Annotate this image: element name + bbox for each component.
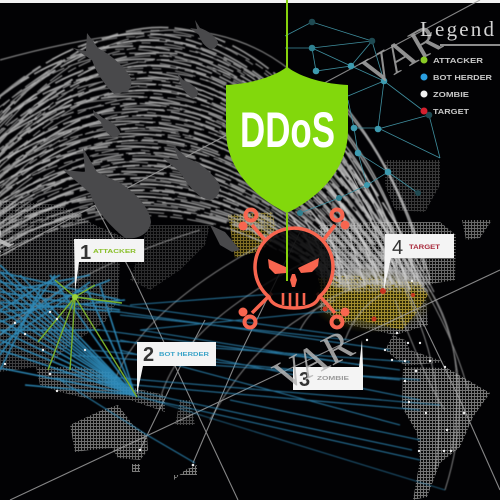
vertical green line <box>286 0 288 70</box>
bomb 1 <box>73 33 131 94</box>
top white strip <box>0 0 500 3</box>
watermark VAR top: VAR <box>354 15 449 97</box>
callout 4 target <box>384 234 454 290</box>
shield with DDoS: DDoS <box>240 102 335 158</box>
callout 2 bot herder: BOT HERDER <box>159 352 210 358</box>
bomb 7 <box>210 225 240 252</box>
legend item attacker: ATTACKER <box>433 58 483 65</box>
callout 4 target: 4 <box>392 237 403 259</box>
callout 4 target: TARGET <box>409 245 440 251</box>
legend item zombie: ZOMBIE <box>433 92 469 99</box>
bones <box>238 210 350 328</box>
bot network links <box>285 22 440 213</box>
bomb 5 <box>63 148 151 238</box>
legend title: Legend <box>420 17 494 41</box>
skull teeth <box>283 293 304 307</box>
skull outline <box>255 228 333 308</box>
shield with DDoS <box>226 67 348 213</box>
legend item target: TARGET <box>433 109 470 116</box>
highlighted map: asia <box>228 212 278 258</box>
bomb 4 <box>93 110 120 137</box>
bomb 3 <box>177 72 198 98</box>
callout 3 zombie: ZOMBIE <box>317 376 349 382</box>
target region glow <box>310 267 434 333</box>
dotted world map <box>0 160 492 500</box>
skull eyes and nose <box>268 258 319 287</box>
callout 2 bot herder <box>137 342 216 395</box>
legend item bot herder: BOT HERDER <box>433 75 492 82</box>
watermark VAR bottom: VAR <box>266 321 361 401</box>
callout 3 zombie <box>293 340 363 391</box>
bot herder traffic <box>0 265 445 490</box>
callout 1 attacker: 1 <box>80 242 91 264</box>
target hot spots <box>322 288 415 322</box>
bombs <box>63 20 240 252</box>
callout 1 attacker <box>74 239 144 292</box>
bomb 6 <box>163 145 220 200</box>
legend <box>420 17 500 116</box>
zombie nodes <box>4 280 465 466</box>
green line over skull <box>286 213 288 281</box>
callout 2 bot herder: 2 <box>143 344 154 366</box>
callout 1 attacker: ATTACKER <box>93 249 137 255</box>
skull and crossbones icon <box>238 210 350 328</box>
legend rule <box>440 44 500 46</box>
highlighted map: target region <box>318 275 428 330</box>
bomb 2 <box>190 20 218 49</box>
bot network nodes <box>297 19 432 216</box>
callout 3 zombie: 3 <box>299 369 310 391</box>
attacker node <box>72 294 78 300</box>
attacker links <box>38 280 137 397</box>
